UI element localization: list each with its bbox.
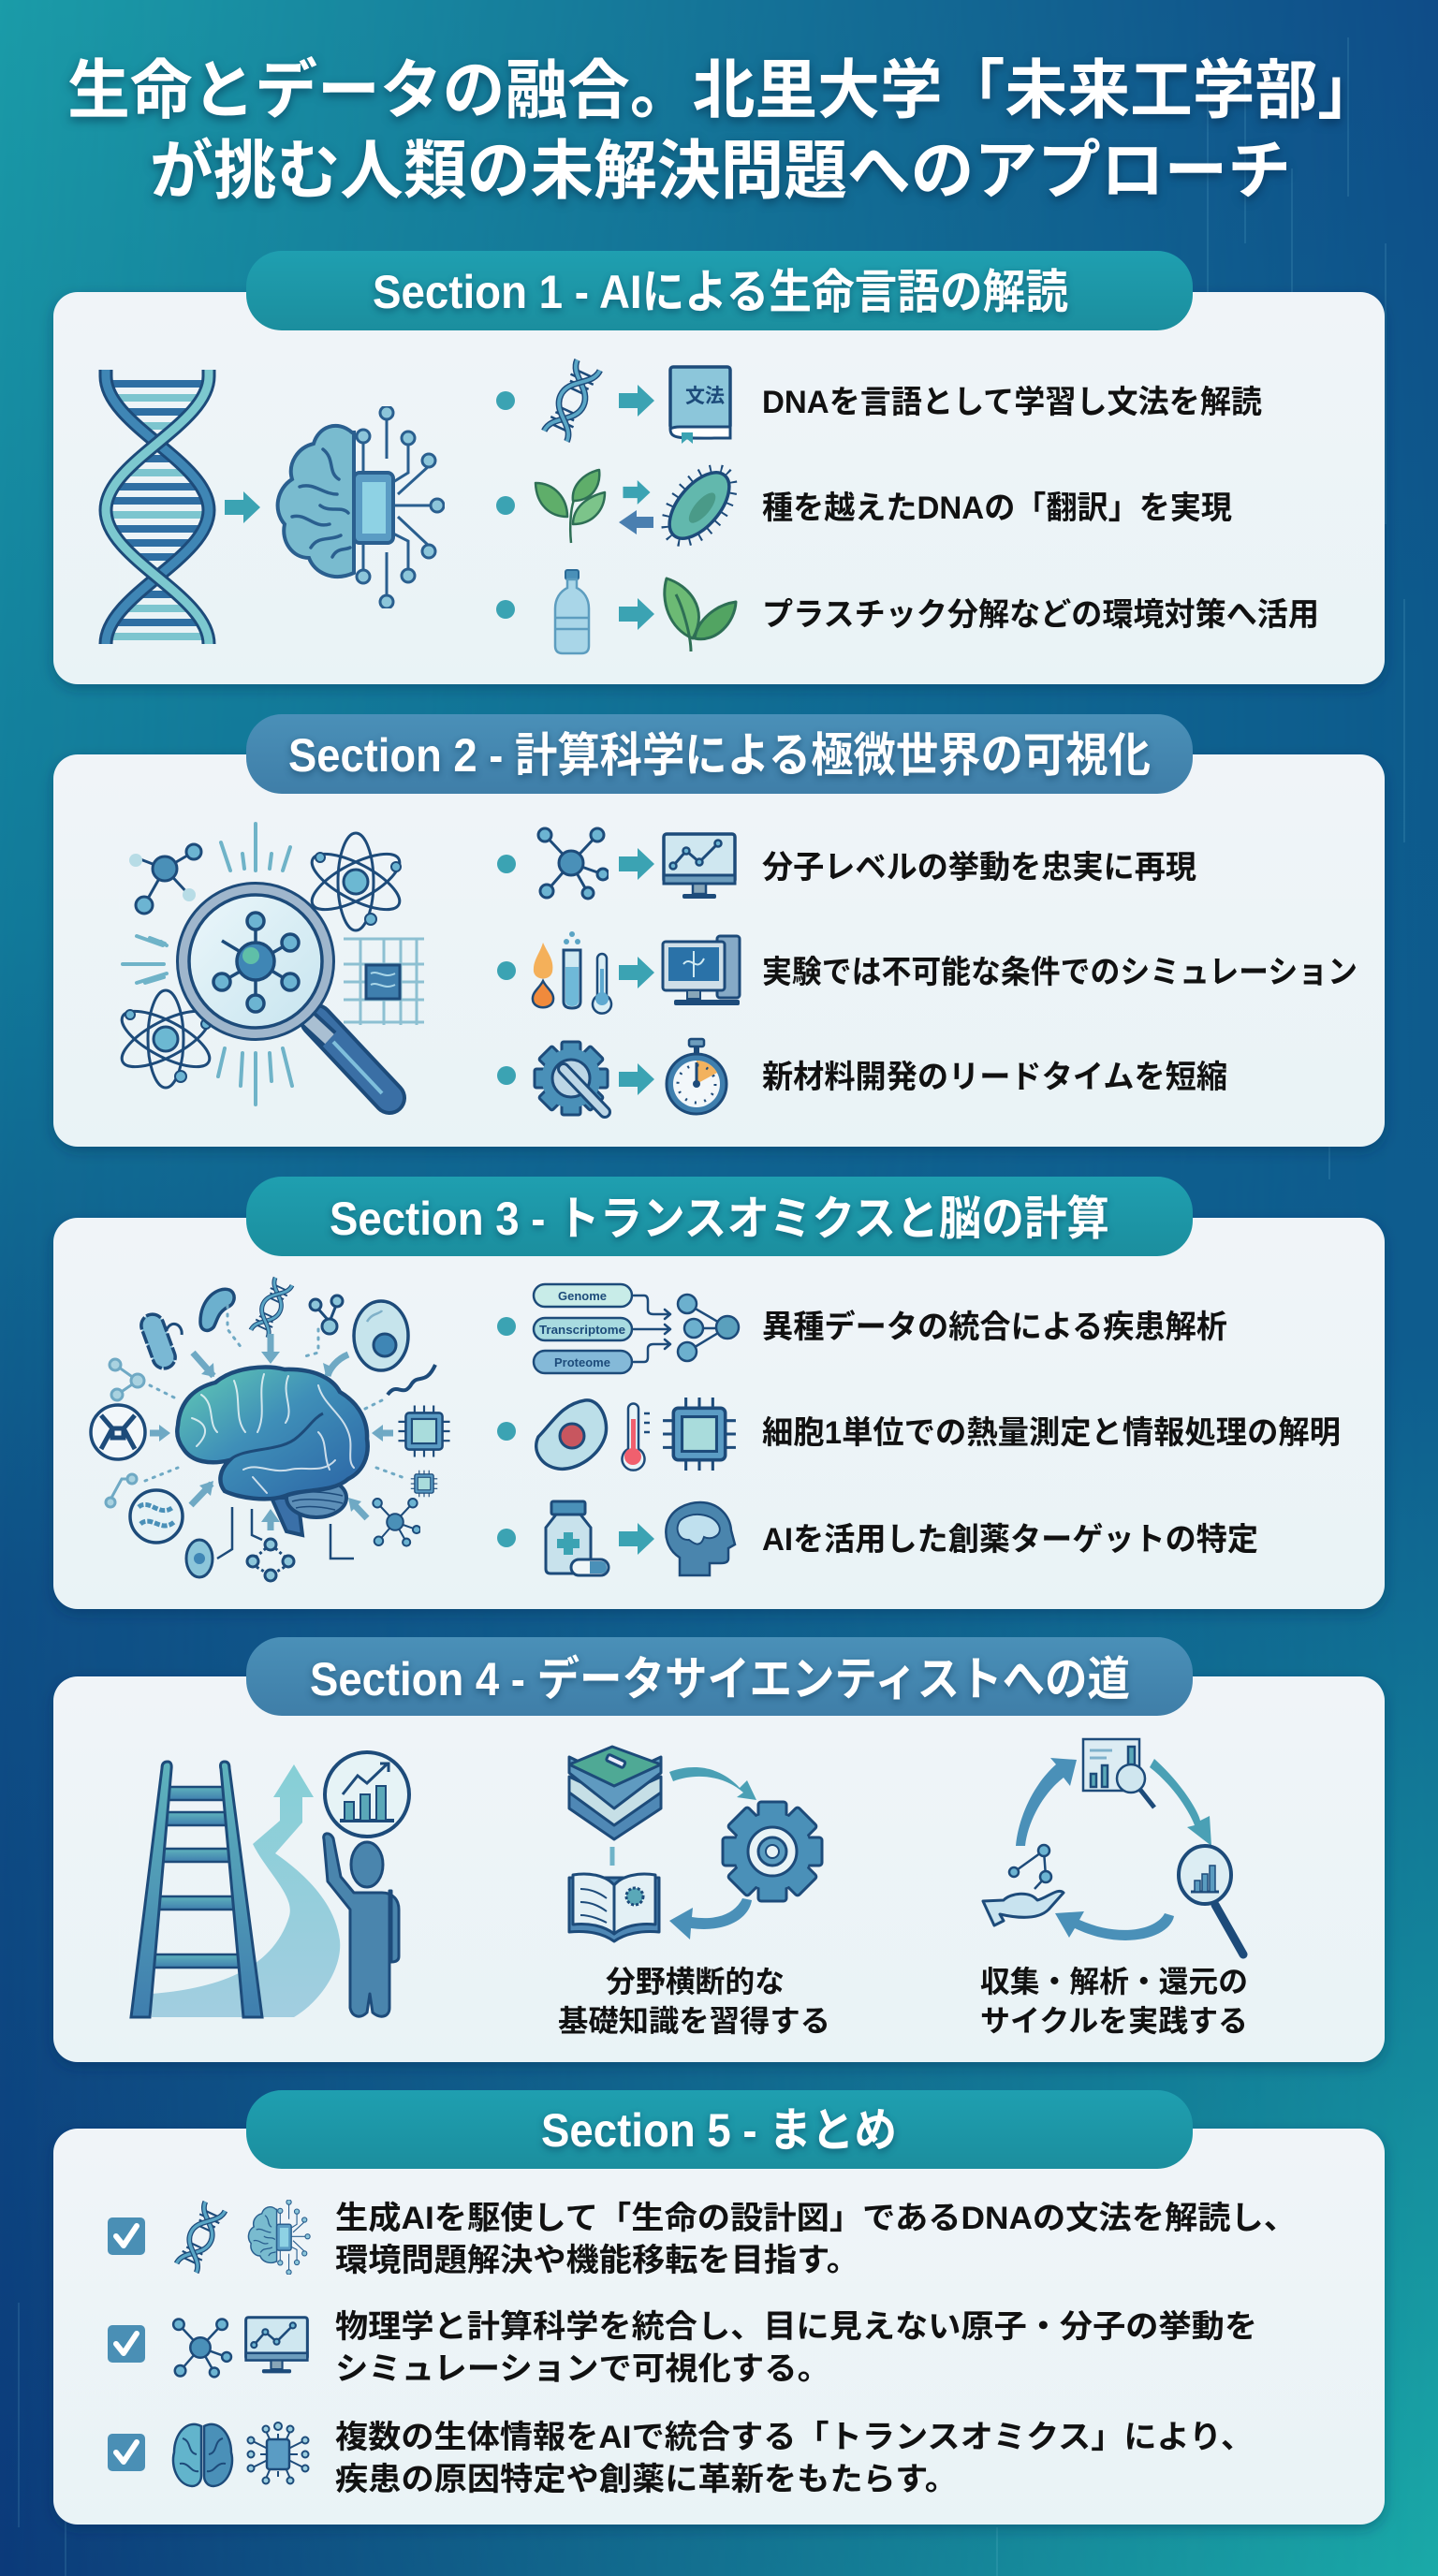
row: simulation: 実験では不可能な条件でのシミュレーション xyxy=(762,955,1357,990)
heading: section 2 xyxy=(246,714,1193,794)
icon: strand xyxy=(388,1365,435,1395)
arrow: book to gear xyxy=(669,1767,756,1800)
row: heterogeneous data: 異種データの統合による疾患解析 xyxy=(762,1309,1227,1345)
icon: growth chart circle xyxy=(325,1752,409,1837)
summary item 3: 疾患の原因特定や創薬に革新をもたらす。 xyxy=(335,2462,958,2497)
panel: section 1 xyxy=(53,251,1385,684)
icon: hand with molecule xyxy=(983,1845,1064,1925)
summary item 1: 生成AIを駆使して「生命の設計図」であるDNAの文法を解読し、 xyxy=(335,2201,1297,2236)
group: data cycle xyxy=(980,1739,1248,1998)
heading: section 1: Section 1 - AIによる生命言語の解読 xyxy=(373,266,1068,318)
icon: gear and wrench xyxy=(535,1042,608,1115)
row: DNA grammar: DNAを言語として学習し文法を解読 xyxy=(762,385,1262,420)
icon: head with brain xyxy=(666,1502,735,1575)
row: plastic decomposition: プラスチック分解などの環境対策へ活用 xyxy=(762,597,1319,633)
icon: omics labels: Transcriptome xyxy=(539,1323,625,1337)
icon: magnifier with molecules xyxy=(114,824,424,1105)
icon: bacterium xyxy=(138,1306,192,1371)
icon: flame and tube xyxy=(533,931,611,1014)
icon: brain with chip xyxy=(278,406,444,608)
summary item 1: 環境問題解決や機能移転を目指す。 xyxy=(335,2243,859,2278)
icon: computer xyxy=(663,936,740,1005)
icon: large DNA helix xyxy=(106,370,209,644)
title: 生命とデータの融合。北里大学「未来工学部」 xyxy=(67,54,1380,126)
heading: section 3 xyxy=(246,1177,1193,1256)
icon: cell and thermometer xyxy=(536,1400,650,1471)
row: lead time: 新材料開発のリードタイムを短縮 xyxy=(762,1060,1227,1095)
icon: brain with data sources xyxy=(91,1278,450,1581)
row: molecular behaviour: 分子レベルの挙動を忠実に再現 xyxy=(762,850,1196,886)
arrows: into brain xyxy=(150,1334,393,1530)
panel: section 4 xyxy=(53,1637,1385,2062)
row: DNA translation: 種を越えたDNAの「翻訳」を実現 xyxy=(762,490,1232,526)
icon: report with magnifier xyxy=(1083,1739,1154,1808)
icon: small molecule top xyxy=(310,1295,343,1334)
icon: cell xyxy=(354,1301,408,1370)
arrow: gear to open book xyxy=(669,1898,752,1939)
icon: grammar book xyxy=(670,367,730,444)
icon: plant xyxy=(536,470,605,543)
heading: section 2: Section 2 - 計算科学による極微世界の可視化 xyxy=(288,729,1151,782)
caption: right second line: サイクルを実践する xyxy=(980,2004,1248,2038)
icon: gear xyxy=(723,1802,822,1901)
icon: medicine bottle xyxy=(546,1501,609,1575)
arrow: DNA to brain xyxy=(225,491,260,523)
title xyxy=(67,54,1380,207)
panel: section 5 xyxy=(53,2090,1385,2525)
icon: leaves xyxy=(665,578,736,651)
icon: protein circle xyxy=(130,1490,183,1543)
icon: book stack xyxy=(569,1747,661,1839)
title: が挑む人類の未解決問題へのアプローチ xyxy=(150,135,1291,207)
arrow: back xyxy=(619,510,653,534)
icon: central brain xyxy=(177,1368,368,1535)
icon: omics labels: Genome xyxy=(558,1289,607,1303)
icon: plastic bottle xyxy=(555,570,589,653)
icon: small cell xyxy=(186,1540,213,1577)
icon: two-lobed brain xyxy=(173,2424,232,2486)
row: drug target: AIを活用した創薬ターゲットの特定 xyxy=(762,1522,1258,1558)
summary item 2: 物理学と計算科学を統合し、目に見えない原子・分子の挙動を xyxy=(335,2309,1257,2345)
icon: antibody circle xyxy=(91,1405,145,1459)
row: DNA grammar xyxy=(496,359,1262,444)
summary item 2 xyxy=(108,2309,1257,2387)
heading: section 4: Section 4 - データサイエンティストへの道 xyxy=(310,1653,1130,1705)
icon: bean xyxy=(200,1289,234,1330)
row: lead time xyxy=(497,1039,1227,1115)
heading: section 5: Section 5 - まとめ xyxy=(541,2104,897,2157)
icon: chip network xyxy=(247,2422,309,2484)
row: drug target xyxy=(497,1501,1258,1575)
summary item 3 xyxy=(108,2420,1254,2497)
panel: section 3 xyxy=(53,1177,1385,1609)
icon: stopwatch xyxy=(667,1039,726,1114)
row: single cell xyxy=(497,1398,1341,1471)
summary item 1 xyxy=(108,2200,1297,2278)
icon: open book xyxy=(569,1874,659,1941)
row: molecular behaviour xyxy=(497,828,1196,899)
group: interdisciplinary learning xyxy=(569,1747,822,1998)
summary item 2: シミュレーションで可視化する。 xyxy=(335,2351,830,2387)
icon: small molecule xyxy=(129,844,201,914)
icon: magnifier with chart xyxy=(1179,1846,1243,1954)
icon: grammar book: 文法 xyxy=(685,386,725,407)
caption: left second line: 基礎知識を習得する xyxy=(558,2004,830,2038)
row: heterogeneous data xyxy=(497,1284,1227,1373)
heading: section 4 xyxy=(246,1637,1193,1716)
icon: omics labels xyxy=(534,1284,739,1373)
heading: section 5 xyxy=(246,2090,1193,2169)
icon: bacteria xyxy=(652,456,747,555)
heading: section 1 xyxy=(246,251,1193,330)
row: DNA translation xyxy=(496,456,1232,555)
caption: left: 分野横断的な xyxy=(606,1965,785,1998)
icon: faded molecules xyxy=(106,1359,144,1507)
summary item 3: 複数の生体情報をAIで統合する「トランスオミクス」により、 xyxy=(335,2420,1254,2455)
icon: network bottom xyxy=(247,1539,294,1581)
row: single cell: 細胞1単位での熱量測定と情報処理の解明 xyxy=(762,1415,1341,1451)
row: simulation xyxy=(497,931,1357,1014)
icon: career ladder and person xyxy=(131,1752,409,2017)
icon: omics labels: Proteome xyxy=(554,1355,610,1369)
caption: right: 収集・解析・還元の xyxy=(980,1965,1248,1998)
heading: section 3: Section 3 - トランスオミクスと脳の計算 xyxy=(330,1193,1109,1245)
panel: section 2 xyxy=(53,714,1385,1147)
row: plastic decomposition xyxy=(496,570,1319,653)
icon: grid with cell xyxy=(344,939,424,1025)
arrows: cycle xyxy=(1016,1758,1211,1940)
